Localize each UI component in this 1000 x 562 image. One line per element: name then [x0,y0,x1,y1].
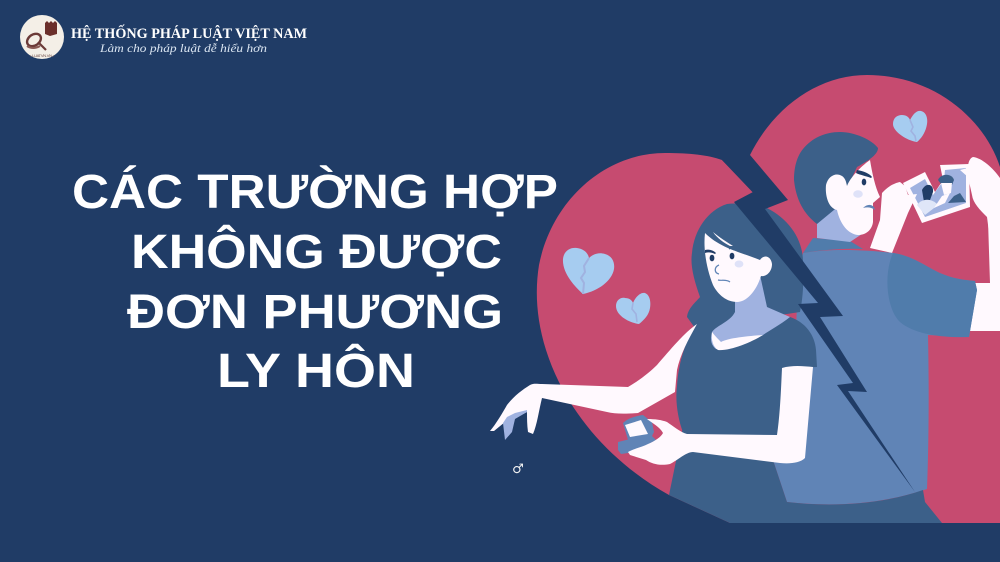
lightning crack [722,155,915,492]
man right hand [960,157,1000,240]
man face [826,160,880,235]
man sleeve shade [887,253,977,337]
woman face [704,233,772,302]
icon: broken heart top [893,111,927,142]
man neck [817,205,862,242]
header title: HỆ THỐNG PHÁP LUẬT VIỆT NAM [71,24,307,42]
man collar [803,238,863,253]
torn photo [903,164,970,223]
header subtitle: Làm cho pháp luật dễ hiểu hơn [99,41,267,55]
main title: CÁC TRƯỜNG HỢP [72,164,558,219]
woman extended arm [490,324,697,434]
ring box [618,415,656,454]
icon: broken heart small [616,293,650,324]
broken heart background [537,75,1000,523]
woman eyes and brows [705,250,716,254]
man torso [773,250,977,504]
man right arm [960,220,1000,331]
lower slate skirt [669,427,942,523]
woman collar highlight [712,332,763,350]
man eye and brow [856,170,872,178]
man figure [773,132,1000,504]
woman dress [676,313,817,440]
woman neck and chest [711,275,790,349]
main title: LY HÔN [217,343,415,398]
woman front arm [628,366,813,465]
small male symbol: ♂ [512,462,524,477]
woman finger shade [503,410,527,440]
main title: ĐƠN PHƯƠNG [127,286,503,339]
logo: • LUATVN.VN • [30,53,55,58]
woman figure [490,203,942,523]
main title: KHÔNG ĐƯỢC [131,224,502,279]
woman hair [687,203,803,328]
main title [72,164,558,398]
man left hand and arm [870,182,917,253]
icon: broken heart large [563,248,614,294]
man hair [794,132,878,224]
woman hair strand [713,232,733,246]
logo [20,15,64,59]
